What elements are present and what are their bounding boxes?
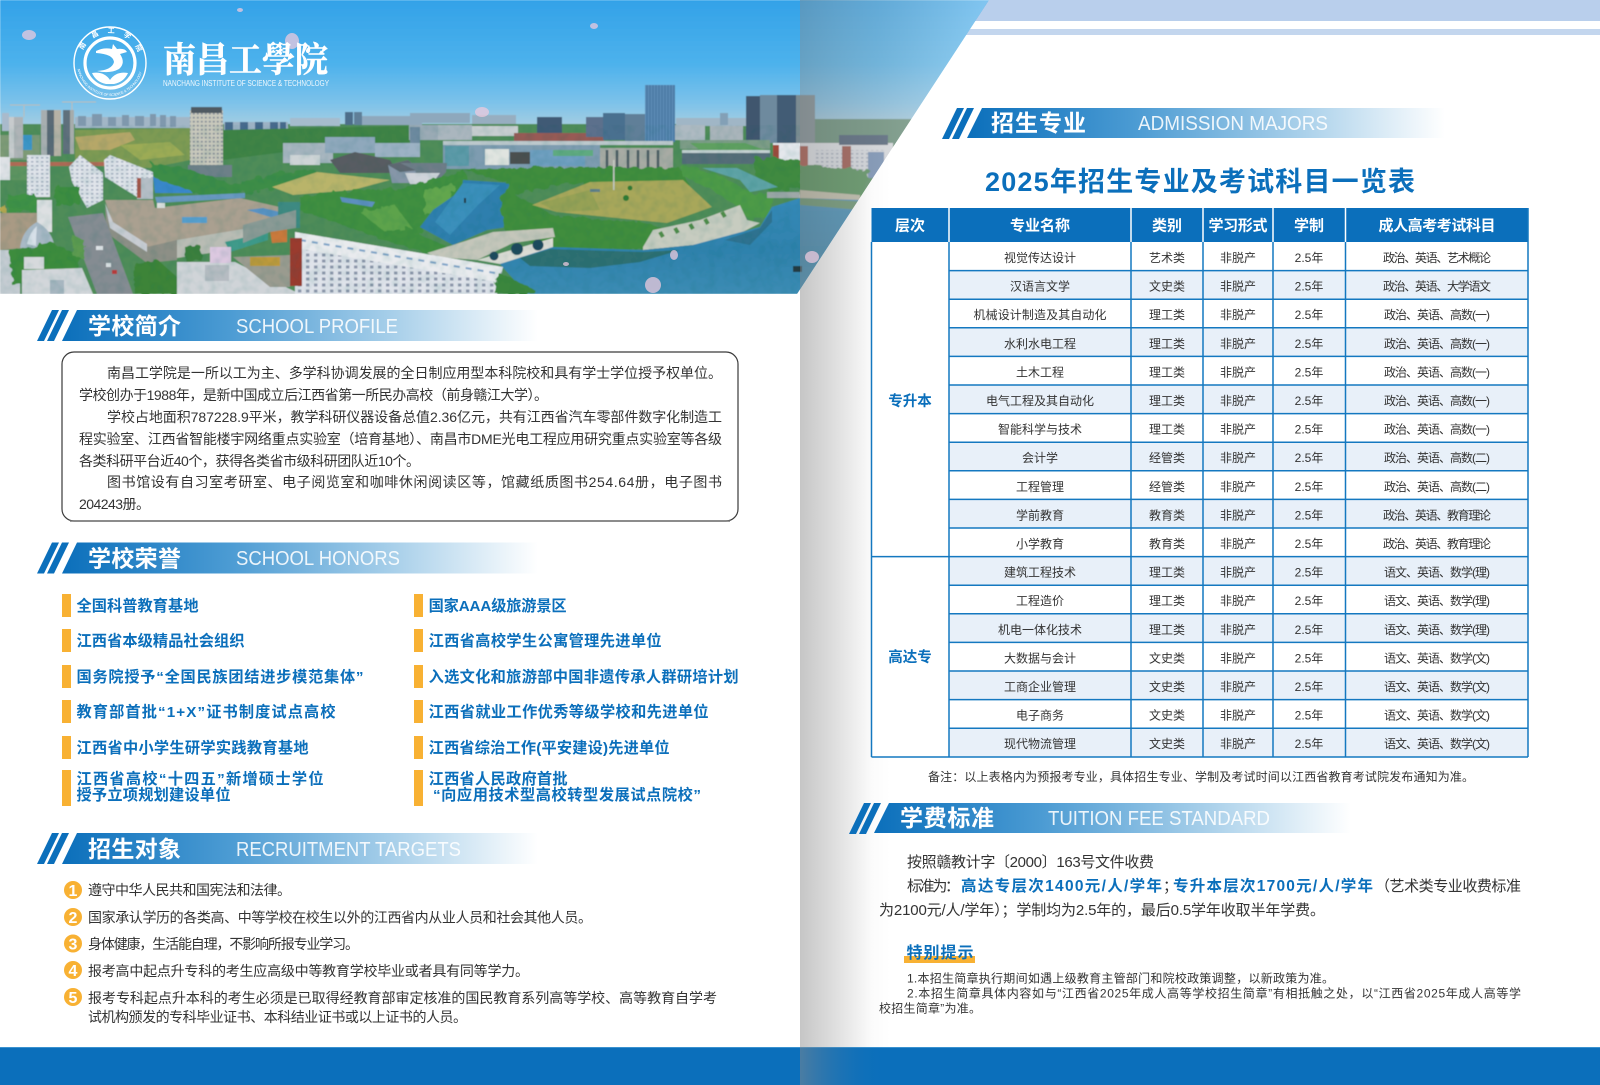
panel: honors list: 江西省高校学生公寓管理先进单位: [429, 632, 662, 650]
drifting petals: [22, 8, 819, 293]
table body text: 政治、英语、大学语文: [1383, 279, 1491, 294]
table body text: 非脱产: [1220, 708, 1256, 723]
table body text: 政治、英语、高数(二): [1384, 479, 1490, 494]
table body text: 非脱产: [1220, 650, 1256, 665]
panel: recruitment target list: 报考专科起点升本科的考生必须是已取得经教育部审定核准的国民教育系列高等学校、高等教育自学考: [88, 990, 717, 1006]
table body text: [974, 250, 1491, 751]
level label: junior college: 高达专: [888, 648, 932, 666]
panel: school profile text box: 南昌工学院是一所以工为主、多学科协调发展的全日制应用型本科院校和具有学士学位授予权单位。: [107, 365, 722, 381]
table body text: 2.5年: [1295, 308, 1323, 322]
table body text: 语文、英语、数学(理): [1384, 622, 1490, 637]
left towers: [14, 116, 24, 158]
heading: school profile: 学校简介: [88, 313, 181, 339]
table body text: 工程管理: [1016, 479, 1064, 494]
far right towers and campus: [409, 125, 438, 140]
panel: honors list: 江西省中小学生研学实践教育基地: [76, 739, 308, 757]
table body text: 2.5年: [1295, 651, 1323, 665]
panel: school profile text box: 程实验室、江西省智能楼宇网络重点实验室（培育基地）、南昌市DME光电工程应用研究重点实验室等各级: [79, 431, 722, 447]
table body text: 土木工程: [1016, 364, 1064, 379]
heading: recruitment targets: RECRUITMENT TARGETS: [236, 839, 461, 861]
panel: school profile text box: 学校创办于1988年，是新中国成立后江西省第一所民办高校（前身赣江大学）。: [79, 387, 548, 403]
left bottom: [0, 213, 37, 250]
white dorm blocks: [0, 157, 10, 180]
panel: recruitment target list: 5: [69, 990, 78, 1007]
wordmark: Chinese name: 南昌工學院: [163, 33, 328, 83]
table body text: 2.5年: [1295, 251, 1323, 265]
table body text: 非脱产: [1220, 507, 1256, 522]
table body text: 汉语言文学: [1010, 279, 1070, 294]
fold overlay on right part of the photo: [797, 0, 989, 294]
text block: tuition details: [879, 854, 1521, 919]
table body text: 非脱产: [1220, 479, 1256, 494]
heading: tuition fee standard: TUITION FEE STANDARD: [1048, 808, 1270, 830]
table body text: 非脱产: [1220, 422, 1256, 437]
heading: school profile: SCHOOL PROFILE: [236, 316, 398, 338]
table body text: 非脱产: [1220, 364, 1256, 379]
table body text: 文史类: [1149, 679, 1185, 694]
table body text: 2.5年: [1295, 394, 1323, 408]
table body text: 语文、英语、数学(理): [1384, 593, 1490, 608]
table body text: 文史类: [1149, 736, 1185, 751]
table body text: 非脱产: [1220, 536, 1256, 551]
table body text: 工程造价: [1016, 593, 1064, 608]
table body text: 非脱产: [1220, 250, 1256, 265]
table body text: 经管类: [1149, 450, 1185, 465]
table body text: 理工类: [1149, 365, 1185, 379]
table body text: 非脱产: [1220, 565, 1256, 580]
logo: school emblem and wordmark: [73, 26, 330, 100]
text block: tuition details: （艺术类专业收费标准: [1375, 878, 1521, 895]
bridge: [477, 238, 553, 264]
panel: honors list: 国家AAA级旅游景区: [429, 597, 567, 615]
table header row: 专业名称: [1010, 216, 1070, 234]
table body text: 智能科学与技术: [998, 422, 1082, 437]
heading: school honors: [37, 542, 538, 574]
mid campus buildings: [283, 143, 333, 163]
table body text: 2.5年: [1295, 280, 1323, 294]
campus aerial photo banner: [0, 0, 1000, 294]
table body text: 2.5年: [1295, 623, 1323, 637]
text block: tuition details: 高达专层次1400元/人/学年: [961, 876, 1162, 895]
table body text: 理工类: [1149, 566, 1185, 580]
table header row: 学习形式: [1208, 216, 1268, 234]
panel: recruitment target list: 4: [69, 963, 78, 980]
trees at the right edge: [800, 165, 870, 198]
panel: recruitment target list: 2: [69, 910, 78, 927]
table body text: 语文、英语、数学(文): [1384, 679, 1490, 694]
table header row: 层次: [895, 216, 925, 234]
skyline and distant land: [0, 123, 894, 294]
special notice: 1.本招生简章执行期间如遇上级教育主管部门和院校政策调整，以新政策为准。: [907, 970, 1334, 986]
table body text: 电气工程及其自动化: [986, 393, 1094, 408]
table zebra rows and grid: [872, 208, 1528, 757]
table body text: 水利水电工程: [1004, 336, 1076, 351]
panel: honors list: 全国科普教育基地: [76, 597, 198, 615]
table header row: [872, 208, 1528, 242]
panel: honors list: [62, 594, 739, 806]
table body text: 2.5年: [1295, 451, 1323, 465]
table body text: 政治、英语、高数(一): [1384, 336, 1490, 351]
table body text: 文史类: [1149, 708, 1185, 723]
table body text: 政治、英语、教育理论: [1383, 536, 1491, 551]
heading: tuition fee standard: [849, 803, 1351, 834]
icon: school emblem: [73, 26, 147, 100]
table body text: 文史类: [1149, 650, 1185, 665]
table body text: 视觉传达设计: [1004, 250, 1076, 265]
table title: 2025年招生专业及考试科目一览表: [985, 167, 1415, 197]
table body text: 政治、英语、高数(一): [1384, 422, 1490, 437]
panel: honors list: 国务院授予“全国民族团结进步模范集体”: [76, 668, 364, 686]
panel: school profile text box: 学校占地面积787228.9平米，教学科研仪器设备总值2.36亿元，共有江西省汽车零部件数字化制造工: [107, 409, 722, 425]
special notice: 2.本招生简章具体内容如与“江西省2025年成人高等学校招生简章”有相抵触之处，以“江西省2025年成人高等学: [907, 986, 1521, 1000]
table body text: 2.5年: [1295, 594, 1323, 608]
table body text: 2.5年: [1295, 566, 1323, 580]
panel: honors list: “向应用技术型高校转型发展试点院校”: [433, 786, 701, 804]
table body text: 2.5年: [1295, 480, 1323, 494]
panel: school profile text box: 204243册。: [79, 496, 150, 512]
panel: recruitment target list: 国家承认学历的各类高、中等学校在校生以外的江西省内从业人员和社会其他人员。: [88, 910, 592, 926]
panel: recruitment target list: 身体健康，生活能自理，不影响所报专业学习。: [88, 936, 359, 952]
special notice: 特别提示: [906, 943, 974, 962]
heading: school honors: SCHOOL HONORS: [236, 548, 400, 570]
promenade: [643, 205, 760, 250]
inner lake: [420, 180, 510, 245]
panel: honors list: 江西省高校“十四五”新增硕士学位: [76, 770, 324, 788]
table body text: 语文、英语、数学(文): [1384, 650, 1490, 665]
panel: recruitment target list: 试机构颁发的专科毕业证书、本科结业证书或以上证书的人员。: [88, 1009, 467, 1025]
heading: school honors: 学校荣誉: [88, 546, 181, 572]
table body text: 非脱产: [1220, 736, 1256, 751]
table header row: 成人高考考试科目: [1378, 216, 1496, 234]
table body text: 2.5年: [1295, 423, 1323, 437]
table body text: 大数据与会计: [1004, 650, 1076, 665]
main lake: [498, 198, 870, 294]
table body text: 政治、英语、教育理论: [1383, 507, 1491, 522]
table body text: 教育类: [1149, 507, 1185, 522]
tall tower: [190, 110, 223, 168]
heading: admission majors: ADMISSION MAJORS: [1138, 113, 1328, 135]
text block: tuition details: 专升本层次1700元/人/学年: [1173, 876, 1373, 895]
table body text: 政治、英语、高数(二): [1384, 450, 1490, 465]
footer bar: [0, 1047, 1600, 1085]
mall: [105, 198, 293, 247]
heading: admission majors: 招生专业: [991, 110, 1086, 136]
table body text: 理工类: [1149, 594, 1185, 608]
table body text: 非脱产: [1220, 279, 1256, 294]
table body text: 经管类: [1149, 479, 1185, 494]
table body text: 非脱产: [1220, 307, 1256, 322]
boat: [793, 266, 802, 272]
table body text: 非脱产: [1220, 450, 1256, 465]
table body text: 2.5年: [1295, 537, 1323, 551]
text block: tuition details: 按照赣教计字〔2000〕163号文件收费: [907, 854, 1154, 871]
panel: honors list: 江西省就业工作优秀等级学校和先进单位: [429, 703, 709, 721]
table body text: 会计学: [1022, 450, 1058, 465]
table body text: 政治、英语、高数(一): [1384, 393, 1490, 408]
table body text: 文史类: [1149, 279, 1185, 294]
table body text: 艺术类: [1149, 251, 1185, 265]
table header row: 学制: [1294, 216, 1324, 234]
table body text: 政治、英语、艺术概论: [1383, 251, 1491, 265]
panel: school profile text box: 各类科研平台近40个，获得各类省市级科研团队近10个。: [79, 453, 420, 469]
text block: tuition details: ；: [1163, 878, 1178, 895]
wordmark: English name: NANCHANG INSTITUTE OF SCIENCE & TECHNOLOGY: [163, 79, 330, 88]
panel: school profile text box: [62, 352, 738, 521]
island: [463, 158, 800, 252]
table body text: 语文、英语、数学(文): [1384, 708, 1490, 723]
trees east of mall: [300, 170, 470, 258]
table body text: 非脱产: [1220, 593, 1256, 608]
table body text: 语文、英语、数学(文): [1384, 736, 1490, 751]
panel: recruitment target list: 遵守中华人民共和国宪法和法律。: [88, 882, 291, 898]
water strip by right shore: [800, 198, 858, 210]
panel: honors list: 江西省综治工作(平安建设)先进单位: [429, 739, 670, 757]
panel: recruitment target list: 3: [69, 936, 78, 954]
table body text: 2.5年: [1295, 508, 1323, 522]
table header row: 类别: [1152, 218, 1182, 234]
table body text: 理工类: [1149, 623, 1185, 637]
right pond: [702, 168, 778, 192]
special notice: 校招生简章”为准。: [879, 1000, 981, 1016]
heading: recruitment targets: [37, 833, 538, 864]
text block: tuition details: 为2100元/人/学年）；学制均为2.5年的，最后0.5学年收取半年学费。: [879, 902, 1325, 919]
panel: recruitment target list: 1: [69, 883, 78, 900]
table body text: 政治、英语、高数(一): [1384, 364, 1490, 379]
table body text: 2.5年: [1295, 737, 1323, 751]
table body text: 非脱产: [1220, 336, 1256, 351]
level label: upgrade to bachelor: 专升本: [888, 392, 932, 410]
table body text: 语文、英语、数学(理): [1384, 565, 1490, 580]
table body text: 现代物流管理: [1004, 736, 1076, 751]
table body text: 非脱产: [1220, 679, 1256, 694]
foreground hotel: [295, 232, 503, 294]
table body text: 非脱产: [1220, 393, 1256, 408]
panel: honors list: 授予立项规划建设单位: [76, 786, 230, 804]
table: majors and exam subjects: [872, 208, 1528, 757]
panel: recruitment target list: 报考高中起点升专科的考生应高级中等教育学校毕业或者具有同等学力。: [88, 963, 529, 979]
table body text: 2.5年: [1295, 709, 1323, 723]
panel: honors list: 入选文化和旅游部中国非遗传承人群研培计划: [429, 668, 739, 686]
panel: honors list: 江西省人民政府首批: [429, 770, 568, 788]
special notice: [879, 943, 1521, 1016]
table footnote: 备注：以上表格内为预报考专业，具体招生专业、学制及考试时间以江西省教育考试院发布通知为准。: [928, 769, 1474, 784]
panel: honors list: 江西省本级精品社会组织: [76, 632, 244, 650]
heading: school profile: [37, 310, 538, 341]
table body text: 建筑工程技术: [1004, 565, 1076, 580]
panel: recruitment target list: [64, 881, 717, 1025]
table body text: 工商企业管理: [1004, 679, 1076, 694]
table body text: 教育类: [1149, 536, 1185, 551]
table body text: 2.5年: [1295, 680, 1323, 694]
heading: tuition fee standard: 学费标准: [900, 805, 994, 831]
table body text: 电子商务: [1016, 708, 1064, 723]
table body text: 机械设计制造及其自动化: [974, 307, 1106, 322]
table body text: 理工类: [1149, 308, 1185, 322]
text block: tuition details: 标准为：: [907, 878, 960, 895]
table body text: 机电一体化技术: [998, 623, 1082, 637]
table body text: 理工类: [1149, 423, 1185, 437]
panel: honors list: 教育部首批“1+X”证书制度试点高校: [76, 703, 336, 721]
heading: admission majors: [942, 108, 1445, 139]
table body text: 小学教育: [1016, 536, 1064, 551]
table body text: 理工类: [1149, 394, 1185, 408]
table body text: 非脱产: [1220, 622, 1256, 637]
table body text: 学前教育: [1016, 507, 1064, 522]
icon: school emblem: 南昌工学院: [78, 28, 143, 52]
decorative light blue bands top right: [965, 0, 1600, 35]
icon: school emblem: NANCHANG INSTITUTE OF SCIENCE & TECHNOLOGY: [78, 68, 142, 96]
table body text: 2.5年: [1295, 337, 1323, 351]
table body text: 理工类: [1149, 337, 1185, 351]
table body text: 2.5年: [1295, 365, 1323, 379]
table body text: 政治、英语、高数(一): [1384, 307, 1490, 322]
trees and grass north of mall: [0, 162, 318, 212]
panel: school profile text box: 图书馆设有自习室考研室、电子阅览室和咖啡休闲阅读区等，馆藏纸质图书254.64册，电子图书: [107, 474, 722, 490]
heading: recruitment targets: 招生对象: [88, 836, 181, 862]
